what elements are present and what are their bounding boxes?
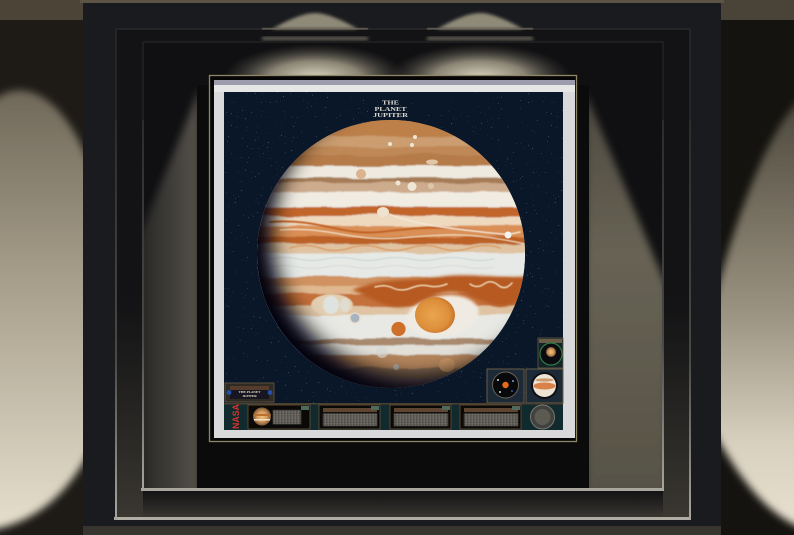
bottom information strip (224, 403, 563, 430)
seal medallion (530, 405, 554, 429)
inset: solar system (487, 369, 524, 403)
poster title: PLANET (374, 107, 407, 113)
card 2 (319, 405, 380, 429)
inset: Jupiter medallion (538, 338, 563, 368)
planet Jupiter (257, 120, 525, 388)
title plate: JUPITER (242, 394, 257, 398)
poster title: JUPITER (373, 113, 409, 119)
inner panel (143, 42, 663, 489)
poster frame (210, 76, 576, 442)
atmospheric bands (257, 120, 525, 388)
spotlight: right (396, 10, 566, 75)
blue-grey small oval (350, 313, 360, 323)
Great Red Spot (415, 297, 455, 333)
inset: Jupiter close-up (526, 369, 563, 403)
right wall with light pool (700, 0, 794, 535)
card 3 (390, 405, 451, 429)
card 1: Jupiter facts (248, 405, 310, 429)
poster title: THE (382, 100, 399, 106)
cream storm curls (375, 282, 512, 290)
small orange spot (391, 322, 406, 336)
lit right panel (589, 96, 662, 488)
halo around Great Red Spot (406, 293, 480, 316)
left wall with light pool (0, 0, 108, 535)
block behind poster (197, 85, 589, 488)
NASA badge right (268, 390, 272, 395)
title plate (225, 383, 274, 402)
title plate: THE PLANET (239, 390, 261, 394)
NASA logotype: NASA (231, 404, 241, 429)
lit left panel (144, 90, 197, 488)
poster title (373, 100, 409, 119)
spotlight: left (230, 10, 399, 75)
poster starfield (224, 92, 563, 430)
lit lower moulding sides (116, 300, 690, 517)
brown storm belt (352, 275, 528, 307)
NASA badge left (227, 390, 231, 395)
moulding highlights (114, 120, 691, 520)
card 4 (460, 405, 521, 429)
swirl streaks (270, 212, 525, 268)
lower atmosphere marks (376, 354, 455, 372)
upper white spots (356, 135, 512, 238)
outer moulding (116, 29, 690, 519)
white storm oval (311, 294, 353, 316)
limb shadow (257, 127, 506, 388)
